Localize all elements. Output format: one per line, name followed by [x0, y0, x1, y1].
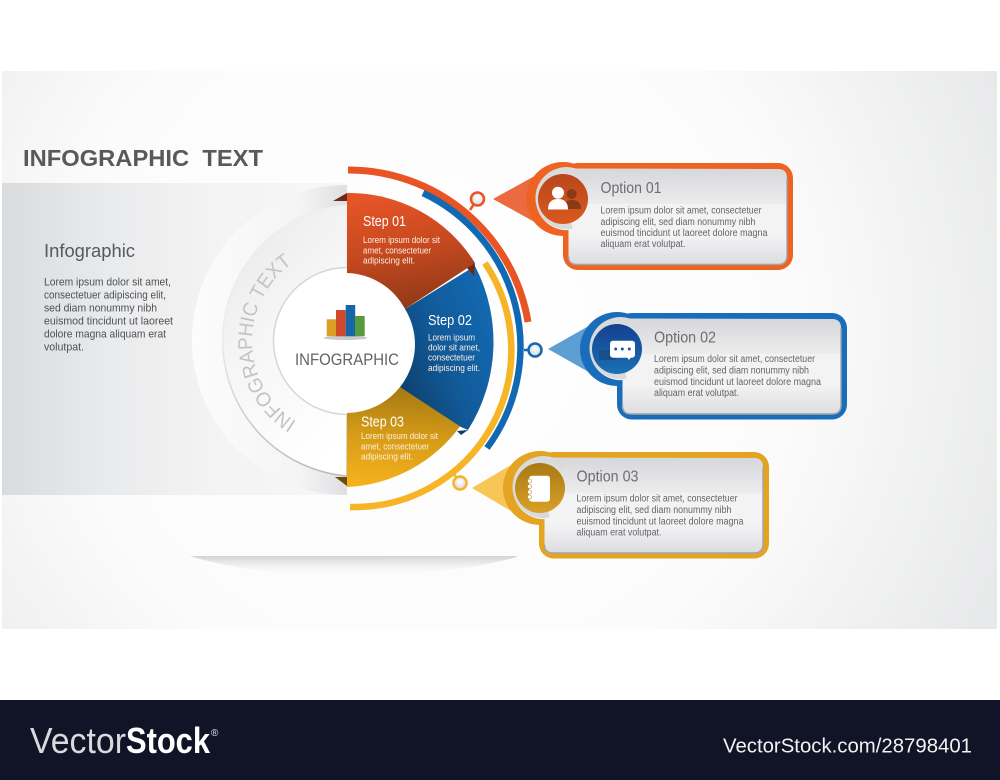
- icon: bar chart: [324, 305, 368, 340]
- segment: step 01: Step 01: [363, 213, 406, 230]
- segment: step 01: amet, consectetuer: [363, 245, 431, 255]
- text: option 02: [654, 330, 821, 399]
- connector node: blue: [524, 344, 542, 356]
- curved label: INFOGRAPHIC TEXT: [238, 252, 296, 432]
- text block: left description: Infographic: [44, 241, 135, 261]
- segment: step 03: [347, 387, 461, 487]
- segment: step 02: Step 02: [428, 312, 472, 329]
- segment: step 01: Lorem ipsum dolor sit: [363, 235, 440, 245]
- grey left band: [2, 183, 347, 495]
- text: option 01: [600, 180, 768, 250]
- fold: top: [333, 193, 347, 201]
- text: option 01: euismod tincidunt ut laoreet dolore magna: [600, 228, 768, 239]
- segment: step 02: Lorem ipsum: [428, 332, 475, 342]
- text: option 03: adipiscing elit, sed diam nonummy nibh: [576, 505, 732, 516]
- text: option 01: Option 01: [600, 180, 662, 197]
- segment: step 02: consectetuer: [428, 353, 475, 363]
- icon: people: [548, 187, 581, 210]
- text block: left description: euismod tincidunt ut laoreet: [44, 316, 174, 328]
- text block: left description: sed diam nonummy nibh: [44, 302, 157, 314]
- text: option 03: Option 03: [576, 468, 638, 486]
- segment: step 02: [400, 266, 493, 435]
- fold: bottom: [335, 477, 347, 486]
- footer bar: [0, 700, 1000, 780]
- segment: step 02: adipiscing elit.: [428, 363, 480, 373]
- arc: orange: [348, 170, 528, 322]
- segment: step 03: Step 03: [361, 414, 404, 430]
- footer bar: Stock: [126, 720, 211, 761]
- background panel: [2, 71, 997, 629]
- segment: step 03: Lorem ipsum dolor sit: [361, 431, 438, 441]
- segment: step 01: [347, 193, 475, 309]
- text block: left description: [44, 241, 174, 354]
- text block: left description: consectetuer adipiscing elit,: [44, 290, 166, 302]
- text: option 01: adipiscing elit, sed diam nonummy nibh: [600, 217, 756, 228]
- arc: blue: [423, 193, 520, 448]
- text: option 03: euismod tincidunt ut laoreet dolore magna: [576, 516, 744, 528]
- text: option 01: aliquam erat volutpat.: [600, 239, 686, 250]
- circular wheel: left half: [192, 185, 347, 495]
- text: option 02: euismod tincidunt ut laoreet dolore magna: [654, 377, 821, 388]
- title: INFOGRAPHIC TEXT: [23, 145, 264, 171]
- text block: left description: Lorem ipsum dolor sit amet,: [44, 276, 171, 288]
- text: option 02: Option 02: [654, 330, 716, 346]
- text block: left description: volutpat.: [44, 342, 84, 354]
- icon: chat bubbles: [599, 341, 635, 360]
- card: option 03: [472, 451, 769, 558]
- icon: notebook: [528, 476, 550, 502]
- card: option 01: [493, 162, 793, 270]
- footer bar: VectorStock.com/28798401: [723, 736, 972, 758]
- centre label: INFOGRAPHIC: [295, 350, 399, 369]
- connector node: orange: [470, 192, 484, 210]
- card: option 02: [548, 312, 847, 420]
- segment: step 03: amet, consectetuer: [361, 441, 429, 451]
- text: option 03: Lorem ipsum dolor sit amet, consectetuer: [576, 494, 738, 504]
- text: option 02: aliquam erat volutpat.: [654, 388, 739, 399]
- arc: yellow: [350, 263, 511, 507]
- connector node: yellow: [453, 473, 466, 490]
- text: option 01: Lorem ipsum dolor sit amet, consectetuer: [600, 206, 762, 216]
- text: option 02: Lorem ipsum dolor sit amet, consectetuer: [654, 354, 816, 365]
- shadow strip under the wheel: [190, 556, 518, 576]
- text block: left description: dolore magna aliquam erat: [44, 328, 167, 340]
- centre circle: [274, 268, 420, 414]
- segment: step 02: dolor sit amet,: [428, 343, 480, 353]
- footer bar: ®: [211, 728, 219, 739]
- segment: step 01: adipiscing elit.: [363, 256, 415, 266]
- footer bar: Vector: [30, 720, 126, 761]
- text: option 03: aliquam erat volutpat.: [576, 528, 662, 538]
- segment: step 03: adipiscing elit.: [361, 452, 413, 462]
- text: option 03: [576, 468, 744, 538]
- text: option 02: adipiscing elit, sed diam nonummy nibh: [654, 366, 809, 376]
